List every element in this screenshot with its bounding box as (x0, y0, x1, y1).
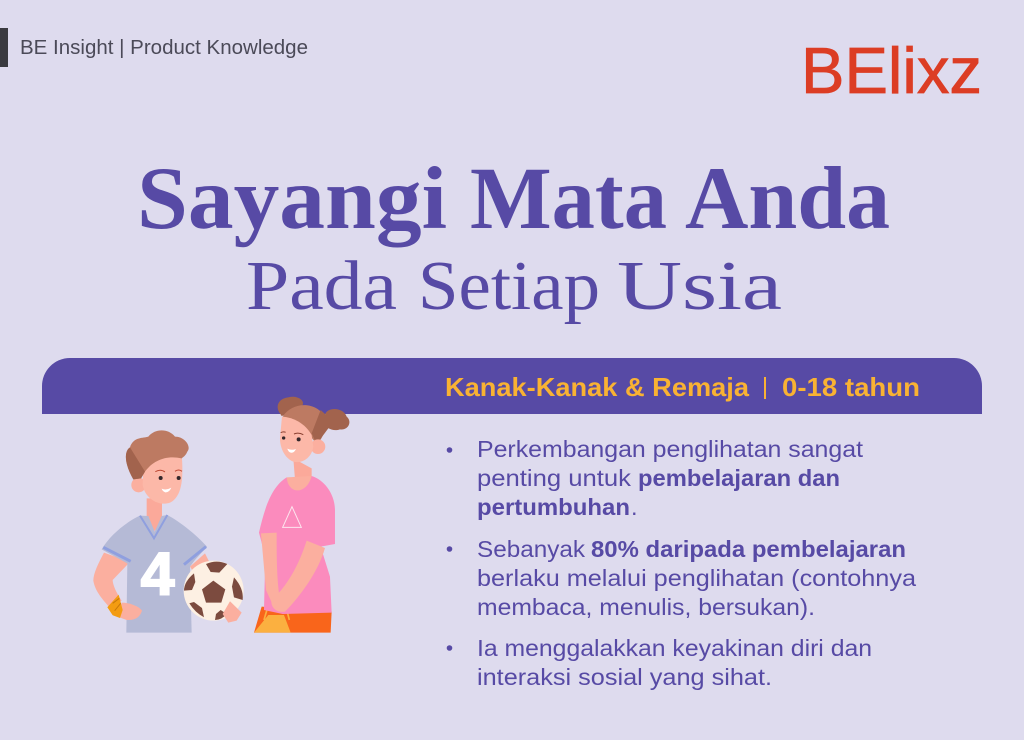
section banner: Kanak-Kanak & Remaja (445, 372, 750, 402)
bullet 2: Sebanyak (477, 536, 585, 562)
bullet 1: penting untuk (477, 465, 631, 491)
subtitle: Setiap (418, 248, 600, 325)
bullet 2: 80% daripada pembelajaran (591, 536, 906, 562)
bullet 3: Ia menggalakkan keyakinan diri dan (477, 635, 872, 661)
title: Sayangi (137, 150, 447, 248)
subtitle: Pada (246, 248, 397, 325)
logo: BElixz: BElixz (801, 34, 982, 107)
football (184, 561, 244, 623)
bullet 2: membaca, menulis, bersukan). (477, 594, 815, 620)
header tag (0, 28, 308, 67)
bullet 1: . (631, 494, 638, 520)
title: Anda (685, 150, 890, 248)
title (137, 150, 890, 248)
section banner: 0-18 tahun (782, 372, 920, 402)
bullet 1: pertumbuhan (477, 494, 630, 520)
bullet 3: interaksi sosial yang sihat. (477, 664, 772, 690)
subtitle (246, 248, 782, 325)
title: Mata (470, 150, 667, 248)
boy (93, 430, 210, 633)
section banner (42, 358, 982, 414)
bullet 2: berlaku melalui penglihatan (contohnya (477, 565, 917, 591)
bullet 1: pembelajaran dan (638, 465, 840, 491)
bullet 1 (447, 436, 863, 520)
subtitle: Usia (617, 248, 782, 325)
header tag: BE Insight | Product Knowledge (20, 36, 308, 59)
bullet 2 (447, 536, 917, 620)
illustration: children (93, 397, 349, 633)
boy: 4 (141, 539, 175, 607)
girl (254, 397, 349, 633)
bullet 1: Perkembangan penglihatan sangat (477, 436, 863, 462)
bullet 3 (447, 635, 872, 690)
